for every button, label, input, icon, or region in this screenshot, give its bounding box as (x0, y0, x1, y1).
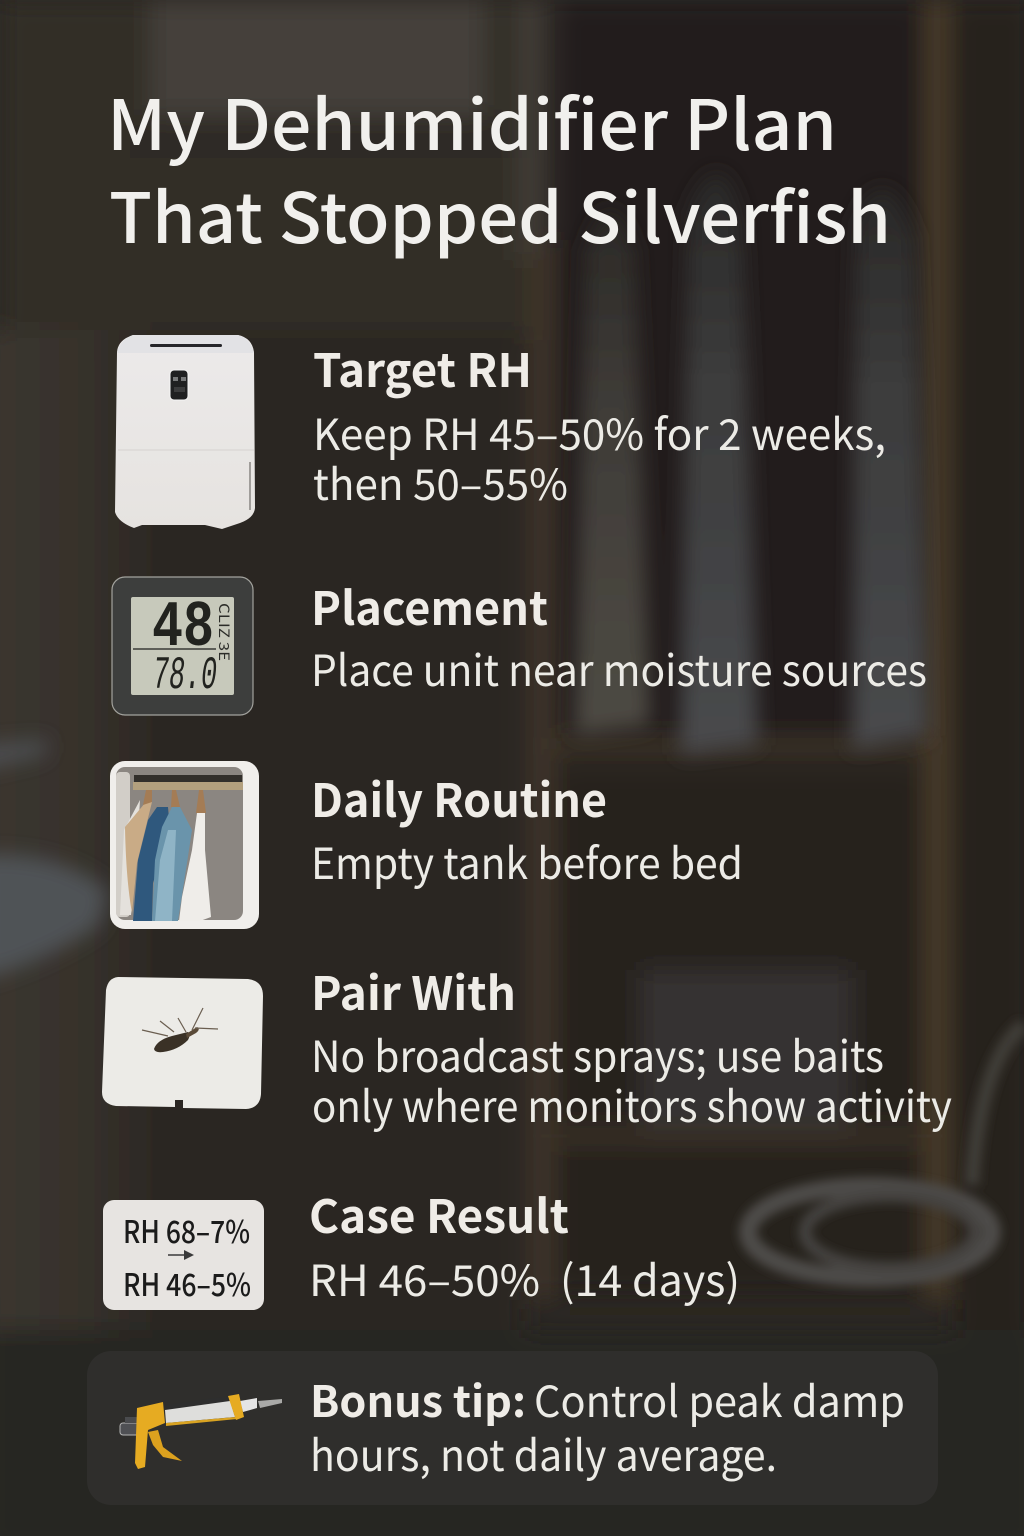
step: placement (311, 573, 927, 699)
icon: closet with clothes (110, 761, 259, 929)
hygrometer temperature reading: 78.0 (153, 650, 217, 702)
step: daily routine: Daily Routine (311, 765, 607, 831)
step: pair with: Pair With (311, 958, 516, 1024)
step: pair with (311, 958, 952, 1135)
panel: bonus tip: Bonus tip: (310, 1368, 526, 1430)
title (107, 70, 891, 263)
step: target RH (313, 335, 886, 513)
step: case result: RH 46–50% (309, 1247, 540, 1309)
step: target RH: Keep RH 45–50% for 2 weeks, (313, 401, 886, 463)
icon: dehumidifier (115, 335, 255, 529)
step: pair with: No broadcast sprays; use baits (311, 1023, 884, 1085)
hygrometer side label: CLIZ 3E (214, 603, 234, 661)
step: placement: Place unit near moisture sources (311, 637, 927, 699)
icon: RH result card (103, 1200, 264, 1310)
step: case result (309, 1181, 740, 1309)
icon: RH result card: RH 68–7% (123, 1207, 250, 1252)
title: My Dehumidifier Plan (107, 70, 837, 170)
step: target RH: Target RH (313, 335, 532, 401)
icon: silverfish monitor card (102, 977, 263, 1109)
icon: RH result card: RH 46–5% (123, 1260, 251, 1305)
step: pair with: only where monitors show activity (312, 1073, 952, 1135)
icon: hygrometer (112, 577, 253, 715)
panel: bonus tip: hours, not daily average. (310, 1422, 777, 1484)
icon: caulk gun (120, 1394, 282, 1469)
title: That Stopped Silverfish (109, 163, 891, 263)
step: daily routine (311, 765, 743, 892)
step: placement: Placement (311, 573, 548, 639)
step: target RH: then 50–55% (313, 451, 568, 513)
step: daily routine: Empty tank before bed (311, 830, 743, 892)
step: case result: (14 days) (560, 1247, 740, 1309)
silverfish (142, 1008, 218, 1052)
panel: bonus tip (87, 1351, 938, 1505)
hygrometer humidity reading: 48 (152, 591, 214, 665)
step: case result: Case Result (309, 1181, 569, 1247)
panel: bonus tip: Control peak damp (534, 1368, 905, 1430)
